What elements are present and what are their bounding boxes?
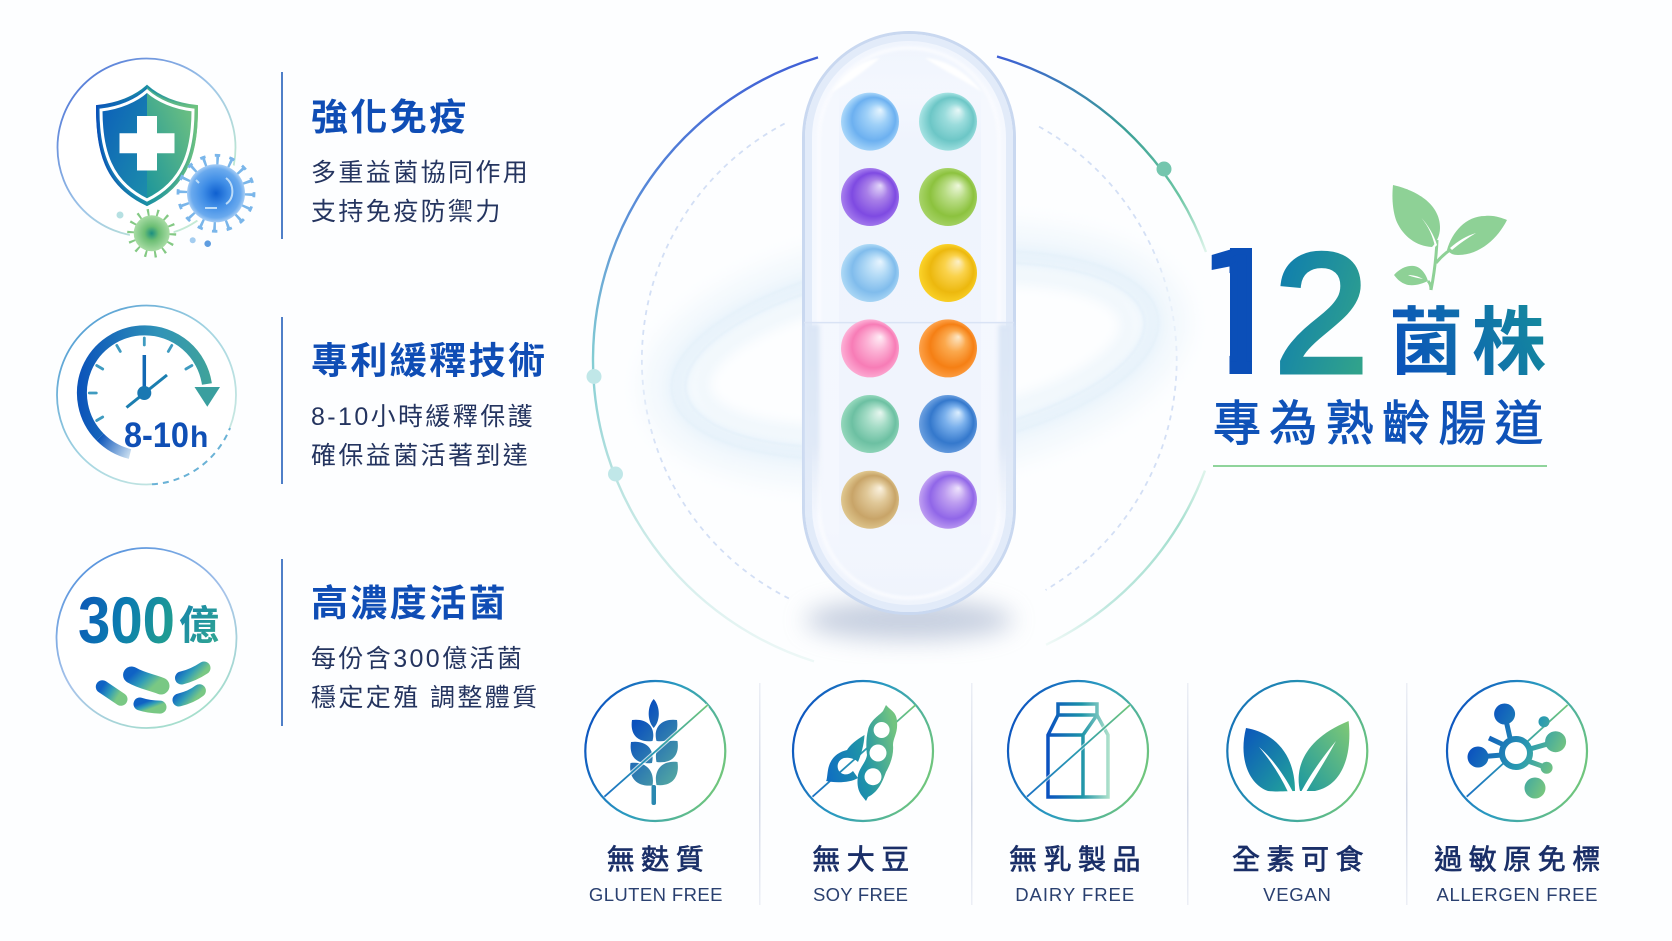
icon: shield with viruses bbox=[58, 58, 254, 255]
capsule highlights bbox=[832, 58, 982, 92]
badge: gluten free bbox=[585, 681, 725, 905]
divider bbox=[1406, 683, 1408, 905]
badge: dairy free: DAIRY FREE bbox=[1015, 884, 1134, 905]
capsule shadow bbox=[805, 600, 1013, 640]
divider bbox=[281, 559, 283, 726]
capsule lower side band left bbox=[805, 324, 820, 524]
strain beads bbox=[841, 93, 977, 529]
capsule glass band bbox=[808, 38, 1010, 608]
heading: 強化免疫 bbox=[311, 87, 469, 141]
badge: soy free: SOY FREE bbox=[813, 884, 908, 905]
divider bbox=[971, 683, 972, 905]
capsule inner rim bbox=[819, 48, 999, 598]
badge: gluten free: 無麩質 bbox=[607, 838, 710, 878]
illustration: capsule with 12 strains bbox=[804, 32, 1014, 640]
badge: vegan: 全素可食 bbox=[1232, 838, 1370, 878]
number 12: 2 bbox=[1274, 219, 1369, 409]
callout: 12 strains headline bbox=[1190, 185, 1555, 467]
badge: dairy free bbox=[1008, 681, 1148, 905]
badge: vegan bbox=[1227, 681, 1370, 905]
icon: clock 8-10h: h bbox=[190, 421, 208, 454]
chart: orbit rings around capsule bbox=[586, 56, 1206, 661]
divider bbox=[281, 317, 283, 484]
badge: vegan: VEGAN bbox=[1263, 884, 1331, 905]
icon: clock 8-10h bbox=[57, 306, 236, 484]
capsule lower side band right bbox=[998, 324, 1013, 524]
badge: dairy free: 無乳製品 bbox=[1009, 838, 1147, 878]
number 12 bbox=[1212, 248, 1362, 374]
badge: allergen free bbox=[1434, 681, 1607, 905]
heading: 高濃度活菌 bbox=[311, 573, 508, 627]
badge: gluten free: GLUTEN FREE bbox=[589, 884, 723, 905]
heading: strains: 菌株 bbox=[1389, 283, 1555, 390]
badge: soy free: 無大豆 bbox=[812, 838, 916, 878]
underline bbox=[1213, 465, 1547, 467]
icon: 300 billion bacteria: 300 bbox=[78, 583, 175, 657]
icon: 300 billion bacteria: 億 bbox=[179, 593, 219, 651]
icon: 300 billion bacteria bbox=[56, 548, 236, 728]
capsule body bbox=[804, 32, 1014, 614]
subheading: 專為熟齡腸道 bbox=[1213, 384, 1551, 454]
description: 多重益菌協同作用 bbox=[311, 159, 530, 187]
divider bbox=[281, 72, 283, 239]
description line 2: 支持免疫防禦力 bbox=[311, 198, 503, 226]
divider bbox=[759, 683, 760, 905]
panel: high concentration live bacteria bbox=[56, 548, 540, 728]
description line 2: 確保益菌活著到達 bbox=[311, 442, 530, 470]
icon: clock 8-10h: 8-10 bbox=[124, 416, 189, 455]
description: 每份含300億活菌 bbox=[311, 645, 524, 673]
panel: immune support feature bbox=[58, 58, 530, 255]
illustration: swirl behind capsule bbox=[639, 203, 1191, 507]
panel: free-from badges bbox=[585, 681, 1607, 905]
capsule inner panel bbox=[839, 80, 981, 580]
divider bbox=[1187, 683, 1188, 905]
panel: patented release technology bbox=[57, 306, 547, 484]
heading: 專利緩釋技術 bbox=[311, 330, 547, 384]
description line 2: 穩定定殖 調整體質 bbox=[311, 684, 540, 712]
icon: sprout bbox=[1392, 185, 1507, 290]
description: 8-10小時緩釋保護 bbox=[311, 403, 535, 431]
badge: allergen free: ALLERGEN FREE bbox=[1436, 884, 1598, 905]
number 12: 1 bbox=[1190, 215, 1287, 410]
capsule seam bbox=[804, 322, 1014, 324]
badge: soy free bbox=[793, 681, 933, 905]
badge: allergen free: 過敏原免標 bbox=[1434, 838, 1607, 878]
